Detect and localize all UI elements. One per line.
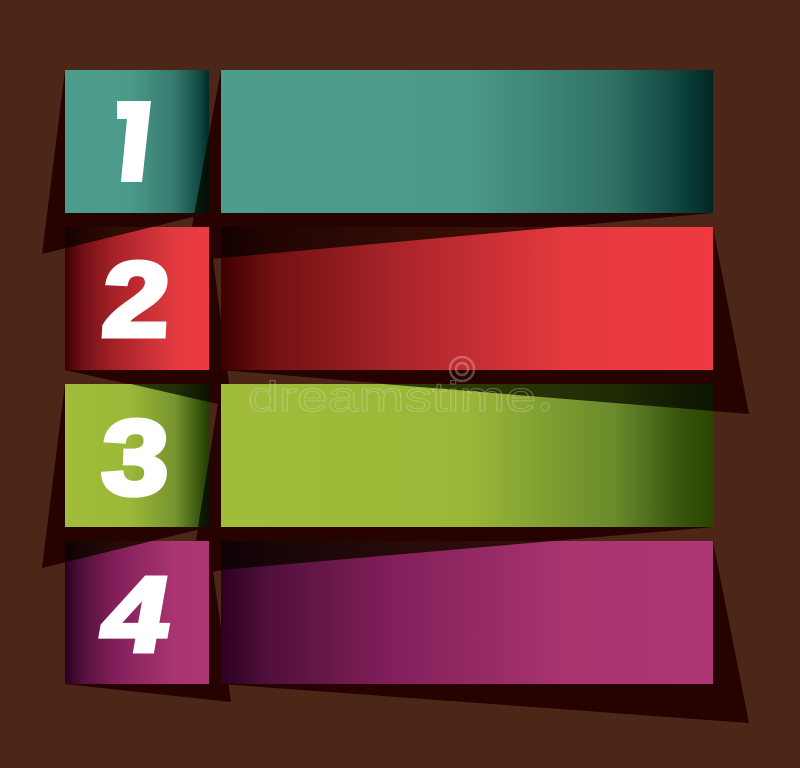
infographic canvas bbox=[42, 70, 749, 723]
number 2: 2 bbox=[99, 241, 173, 359]
watermark bbox=[248, 357, 549, 420]
number 1: 1 bbox=[105, 83, 163, 201]
row 2: red number panel bbox=[65, 227, 209, 370]
row 4: purple banner bbox=[221, 541, 713, 684]
shadows falling on panels bbox=[65, 134, 713, 570]
row 1: teal number panel bbox=[65, 70, 209, 213]
cast shadows on background bbox=[42, 70, 749, 723]
row 1: teal banner bbox=[221, 70, 713, 213]
number 3: 3 bbox=[99, 399, 171, 517]
watermark: dreamstime bbox=[248, 373, 536, 420]
row 3: green number panel bbox=[65, 384, 209, 527]
row 3: green banner bbox=[221, 384, 713, 527]
row 4: purple number panel bbox=[65, 541, 209, 684]
row 2: red banner bbox=[221, 227, 713, 370]
number 4: 4 bbox=[93, 556, 180, 674]
